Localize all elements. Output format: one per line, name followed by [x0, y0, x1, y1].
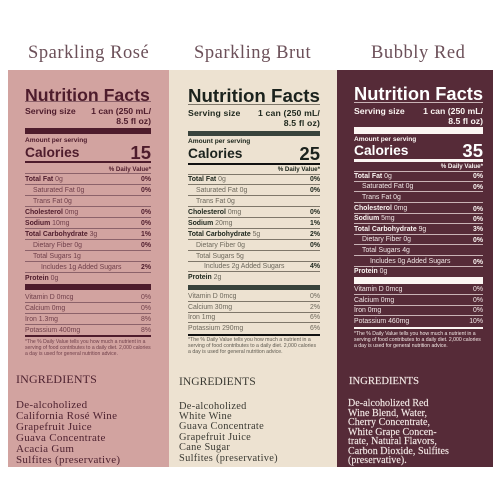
- row: carbohydrate: [188, 228, 320, 240]
- serving size: 1 can (250 mL/: [258, 108, 320, 118]
- row: fiber: Dietary Fiber 0g: [362, 236, 411, 243]
- row: calcium: Calcium 30mg: [188, 304, 232, 310]
- ingredients heading: INGREDIENTS: [16, 372, 97, 386]
- heading: Sparkling Brut: Sparkling Brut: [194, 43, 311, 63]
- percent daily value: % Daily Value*: [441, 163, 483, 170]
- nutrition label: Red: [354, 83, 483, 329]
- row: vitamin D: Vitamin D 0mcg: [25, 294, 74, 301]
- row: vitamin D: [25, 292, 151, 303]
- row: cholesterol: [354, 202, 483, 214]
- footnote: serving of food contributes to a daily diet. 2,000 calories: [25, 345, 151, 351]
- ingredients list: Grapefruit Juice: [16, 421, 92, 433]
- row: added sugars: Includes 2g Added Sugars: [204, 263, 284, 270]
- row: saturated fat: Saturated Fat 0g: [33, 187, 84, 194]
- row: iron: 6%: [310, 314, 320, 321]
- calories: [25, 142, 151, 163]
- row: calcium: [188, 302, 320, 312]
- footnote: serving of food contributes to a daily diet. 2,000 calories: [354, 337, 481, 343]
- row: carbohydrate: 2%: [310, 230, 320, 238]
- row: added sugars: [188, 261, 320, 272]
- row: trans fat: Trans Fat 0g: [362, 194, 401, 200]
- row: carbohydrate: Total Carbohydrate 5g: [188, 230, 260, 238]
- footnote: a day is used for general nutrition advice.: [188, 349, 283, 355]
- row: vitamin D: 0%: [473, 286, 483, 293]
- row: cholesterol: 0%: [473, 206, 483, 212]
- nutrition label: Rosé: [25, 85, 151, 337]
- panel: Sparkling Brut: [169, 70, 337, 467]
- row: potassium: 10%: [469, 318, 483, 324]
- heading: Bubbly Red: Bubbly Red: [371, 43, 465, 63]
- row: vitamin D: 0%: [310, 292, 320, 300]
- row: protein: Protein 0g: [354, 268, 387, 275]
- row: trans fat: [354, 192, 483, 202]
- ingredients list: Grapefruit Juice: [179, 432, 251, 443]
- label title: Nutrition Facts: [25, 85, 150, 105]
- row: saturated fat: [188, 185, 320, 196]
- footnote: a day is used for general nutrition advice.: [354, 343, 448, 349]
- serving size: 1 can (250 mL/: [91, 106, 151, 116]
- row: iron: [25, 314, 151, 325]
- row: cholesterol: Cholesterol 0mg: [188, 209, 241, 216]
- row: total fat: Total Fat 0g: [188, 176, 226, 183]
- ingredients list: California Rosé Wine: [16, 410, 117, 422]
- row: sodium: [25, 218, 151, 229]
- row: added sugars: [25, 262, 151, 273]
- label title: Nutrition Facts: [354, 83, 483, 104]
- serving size: [354, 106, 483, 126]
- row: iron: Iron 0mg: [354, 307, 381, 314]
- row: potassium: [188, 324, 320, 332]
- calories: Calories: [188, 146, 242, 161]
- calories: Calories: [25, 145, 79, 160]
- amount per serving: Amount per serving: [188, 138, 250, 145]
- serving size: Serving size: [25, 106, 76, 116]
- calories: [354, 140, 483, 161]
- calories: 35: [462, 140, 483, 161]
- row: saturated fat: Saturated Fat 0g: [196, 187, 247, 194]
- calories: 15: [130, 142, 151, 163]
- row: added sugars: Includes 1g Added Sugars: [41, 264, 121, 271]
- row: potassium: Potassium 400mg: [25, 327, 80, 334]
- row: sugars: [354, 244, 483, 256]
- row: iron: 0%: [473, 307, 483, 314]
- row: calcium: 0%: [141, 305, 151, 312]
- serving size: 8.5 fl oz): [116, 116, 151, 126]
- row: sugars: Total Sugars 5g: [196, 252, 244, 260]
- row: trans fat: Trans Fat 0g: [33, 198, 72, 205]
- row: total fat: 0%: [141, 176, 151, 183]
- row: potassium: 8%: [141, 327, 151, 334]
- row: saturated fat: 0%: [310, 187, 320, 194]
- row: vitamin D: 0%: [141, 294, 151, 301]
- calories: [188, 143, 320, 164]
- row: fiber: Dietary Fiber 0g: [196, 242, 245, 248]
- row: sugars: Total Sugars 4g: [362, 246, 410, 254]
- row: protein: Protein 0g: [25, 275, 58, 282]
- row: iron: [354, 305, 483, 316]
- ingredients list: Sulfites (preservative): [16, 454, 120, 466]
- row: calcium: Calcium 0mg: [25, 305, 65, 312]
- row: fiber: 0%: [310, 242, 320, 248]
- row: sugars: [25, 251, 151, 262]
- row: potassium: Potassium 460mg: [354, 318, 409, 324]
- row: added sugars: 2%: [141, 264, 151, 271]
- row: sodium: Sodium 5mg: [354, 215, 395, 222]
- ingredients list: [348, 398, 449, 466]
- footnote: [188, 337, 316, 355]
- calories: Calories: [354, 143, 408, 158]
- row: carbohydrate: [354, 224, 483, 234]
- row: total fat: Total Fat 0g: [25, 176, 63, 183]
- row: added sugars: 0%: [473, 258, 483, 266]
- ingredients list: Sulfites (preservative): [179, 453, 278, 464]
- row: fiber: [354, 234, 483, 245]
- amount per serving: Amount per serving: [25, 137, 87, 144]
- row: trans fat: [25, 196, 151, 207]
- row: added sugars: 4%: [310, 263, 320, 270]
- row: total fat: 0%: [310, 176, 320, 183]
- row: cholesterol: 0%: [310, 209, 320, 216]
- row: saturated fat: Saturated Fat 0g: [362, 183, 413, 190]
- row: carbohydrate: 1%: [141, 231, 151, 238]
- row: fiber: [25, 240, 151, 251]
- row: calcium: [354, 294, 483, 306]
- row: saturated fat: 0%: [473, 184, 483, 191]
- ingredients list: Guava Concentrate: [179, 421, 264, 432]
- serving size: Serving size: [354, 106, 405, 116]
- ingredients list: White Grape Concen-: [348, 427, 437, 438]
- row: vitamin D: Vitamin D 0mcg: [188, 292, 237, 300]
- ingredients list: Acacia Gum: [16, 443, 74, 455]
- calories: 25: [299, 143, 320, 164]
- ingredients list: Carbon Dioxide, Sulfites: [348, 446, 449, 457]
- ingredients list: Guava Concentrate: [16, 432, 106, 444]
- footnote: serving of food contributes to a daily diet. 2,000 calories: [188, 343, 316, 349]
- row: iron: 8%: [141, 316, 151, 323]
- row: protein: Protein 2g: [188, 274, 221, 281]
- row: potassium: [354, 318, 483, 324]
- row: carbohydrate: Total Carbohydrate 3g: [25, 231, 97, 238]
- row: added sugars: Includes 0g Added Sugars: [370, 258, 450, 264]
- row: cholesterol: Cholesterol 0mg: [354, 204, 407, 212]
- row: cholesterol: [188, 207, 320, 218]
- row: carbohydrate: Total Carbohydrate 9g: [354, 226, 426, 232]
- amount per serving: Amount per serving: [354, 136, 416, 142]
- ingredients list: trate, Natural Flavors,: [348, 436, 437, 447]
- row: fiber: 0%: [141, 242, 151, 249]
- footnote: [354, 330, 481, 349]
- serving size: [188, 108, 320, 128]
- serving size: [25, 106, 151, 126]
- row: total fat: [354, 170, 483, 182]
- serving size: 1 can (250 mL/: [423, 106, 483, 116]
- row: fiber: 0%: [473, 237, 483, 244]
- row: potassium: [25, 326, 151, 334]
- row: trans fat: Trans Fat 0g: [196, 198, 235, 205]
- percent daily value: % Daily Value*: [278, 166, 320, 173]
- row: fiber: [188, 240, 320, 250]
- row: cholesterol: 0%: [141, 209, 151, 216]
- ingredients list: [16, 399, 120, 466]
- row: sodium: [354, 213, 483, 224]
- row: cholesterol: Cholesterol 0mg: [25, 209, 78, 216]
- row: saturated fat: [25, 185, 151, 196]
- row: total fat: [188, 174, 320, 185]
- footnote: *The % Daily Value tells you how much a nutrient in a: [25, 339, 146, 345]
- ingredients list: Cane Sugar: [179, 442, 230, 453]
- percent daily value: % Daily Value*: [109, 166, 151, 173]
- row: sodium: 0%: [141, 220, 151, 227]
- row: potassium: 6%: [310, 324, 320, 332]
- row: sugars: [188, 250, 320, 262]
- ingredients list: [179, 400, 278, 464]
- row: carbohydrate: [25, 229, 151, 240]
- serving size: 8.5 fl oz): [284, 118, 320, 128]
- row: carbohydrate: 3%: [473, 226, 483, 232]
- footnote: a day is used for general nutrition advice.: [25, 351, 118, 357]
- ingredients heading: INGREDIENTS: [349, 376, 419, 386]
- row: calcium: Calcium 0mg: [354, 296, 394, 304]
- row: trans fat: [188, 196, 320, 207]
- row: sodium: Sodium 20mg: [188, 220, 232, 227]
- ingredients list: De-alcoholized Red: [348, 398, 429, 409]
- row: vitamin D: [354, 284, 483, 295]
- row: sodium: 0%: [473, 216, 483, 223]
- row: iron: [188, 312, 320, 323]
- row: sodium: Sodium 10mg: [25, 220, 69, 227]
- row: fiber: Dietary Fiber 0g: [33, 242, 82, 249]
- row: vitamin D: [188, 290, 320, 302]
- row: sodium: [188, 218, 320, 229]
- panel: Sparkling Rosé: [8, 70, 169, 467]
- row: calcium: 2%: [310, 304, 320, 310]
- footnote: [25, 339, 151, 357]
- row: iron: Iron 1.3mg: [25, 316, 58, 323]
- row: calcium: [25, 303, 151, 314]
- row: calcium: 0%: [473, 296, 483, 304]
- row: total fat: 0%: [473, 172, 483, 180]
- row: total fat: Total Fat 0g: [354, 172, 392, 180]
- row: iron: Iron 1mg: [188, 314, 215, 321]
- ingredients heading: INGREDIENTS: [179, 375, 256, 388]
- row: saturated fat: [354, 181, 483, 192]
- serving size: Serving size: [188, 108, 240, 118]
- ingredients list: Wine Blend, Water,: [348, 408, 427, 419]
- heading: Sparkling Rosé: Sparkling Rosé: [28, 43, 149, 63]
- row: sugars: Total Sugars 1g: [33, 253, 81, 260]
- row: potassium: Potassium 290mg: [188, 324, 243, 332]
- nutrition label: Brut: [188, 85, 320, 336]
- row: added sugars: [354, 256, 483, 266]
- row: total fat: [25, 174, 151, 185]
- footnote: *The % Daily Value tells you how much a nutrient in a: [354, 330, 476, 336]
- ingredients list: White Wine: [179, 411, 232, 422]
- ingredients list: De-alcoholized: [179, 400, 247, 412]
- ingredients list: Cherry Concentrate,: [348, 417, 430, 428]
- panel: Bubbly Red: [337, 70, 493, 467]
- row: saturated fat: 0%: [141, 187, 151, 194]
- row: cholesterol: [25, 207, 151, 218]
- footnote: *The % Daily Value tells you how much a nutrient in a: [188, 337, 311, 343]
- row: sodium: 1%: [310, 220, 320, 227]
- serving size: 8.5 fl oz): [448, 116, 483, 126]
- row: vitamin D: Vitamin D 0mcg: [354, 286, 403, 293]
- label title: Nutrition Facts: [188, 85, 320, 106]
- ingredients list: (preservative).: [348, 455, 407, 466]
- ingredients list: De-alcoholized: [16, 399, 87, 411]
